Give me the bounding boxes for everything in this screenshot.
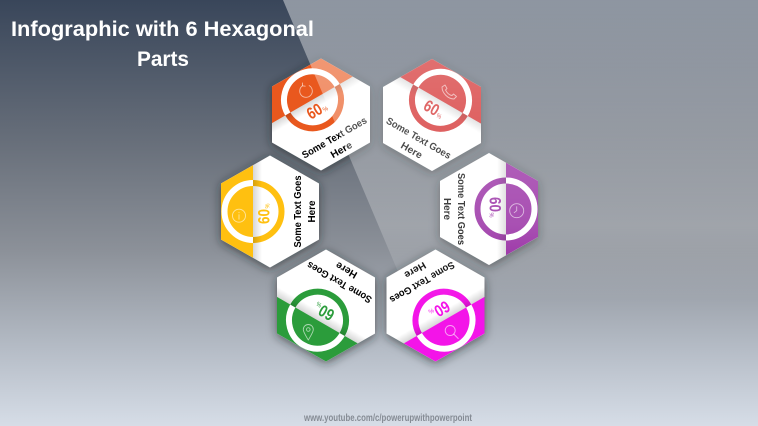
magenta label: Here — [402, 259, 427, 280]
icon: refresh — [300, 83, 312, 97]
red band and ring — [394, 59, 481, 132]
icon: magnifier — [445, 326, 458, 338]
orange percentage: 60 — [304, 100, 326, 123]
icon: clock — [510, 204, 524, 218]
green percentage: % — [315, 300, 323, 308]
yellow label: Some Text Goes — [293, 175, 304, 248]
icon: info — [232, 209, 246, 222]
orange percentage: % — [322, 105, 330, 114]
footer url: www.youtube.com/c/powerupwithpowerpoint — [303, 412, 472, 424]
purple label — [441, 173, 466, 245]
title — [11, 17, 314, 71]
orange hexagon base — [272, 58, 370, 170]
purple label: Here — [441, 198, 452, 220]
red percentage: 60 — [420, 97, 442, 120]
orange label: Here — [329, 140, 355, 161]
green band and ring — [277, 288, 364, 362]
panel: orange hexagon — [266, 58, 375, 177]
title: Parts — [137, 47, 189, 71]
green label: Some Text Goes — [305, 258, 374, 305]
panel: green hexagon — [270, 247, 382, 369]
panel: red hexagon — [378, 59, 486, 176]
purple hexagon base — [440, 153, 538, 265]
green percentage: 60 — [316, 301, 338, 324]
purple percentage: % — [488, 212, 494, 218]
yellow percentage: 60 — [256, 209, 274, 224]
magenta hexagon base — [386, 250, 484, 362]
red percentage: % — [435, 112, 443, 121]
icon: location pin — [303, 324, 313, 340]
magenta band and ring — [397, 288, 484, 362]
title: Infographic with 6 Hexagonal — [11, 17, 314, 41]
panel: yellow hexagon — [214, 154, 326, 274]
green hexagon base — [277, 250, 375, 362]
yellow label: Here — [307, 200, 318, 222]
yellow hexagon base — [221, 156, 319, 268]
panel: purple hexagon — [434, 152, 544, 272]
orange label: Some Text Goes — [300, 115, 369, 161]
red label: Some Text Goes — [384, 116, 453, 162]
purple band and ring — [474, 160, 538, 259]
icon: phone — [442, 85, 456, 99]
magenta percentage: 60 — [431, 297, 453, 320]
red hexagon base — [383, 59, 481, 171]
yellow percentage: % — [264, 203, 272, 208]
magenta percentage: % — [427, 306, 435, 315]
orange band and ring — [272, 58, 358, 132]
yellow label — [293, 175, 318, 248]
yellow band and ring — [221, 162, 284, 262]
light diagonal overlay — [283, 0, 758, 300]
purple percentage: 60 — [486, 197, 504, 212]
magenta label: Some Text Goes — [387, 259, 456, 305]
panel: magenta hexagon — [380, 247, 492, 369]
purple label: Some Text Goes — [455, 173, 466, 245]
green label: Here — [334, 259, 359, 280]
red label: Here — [399, 140, 424, 162]
